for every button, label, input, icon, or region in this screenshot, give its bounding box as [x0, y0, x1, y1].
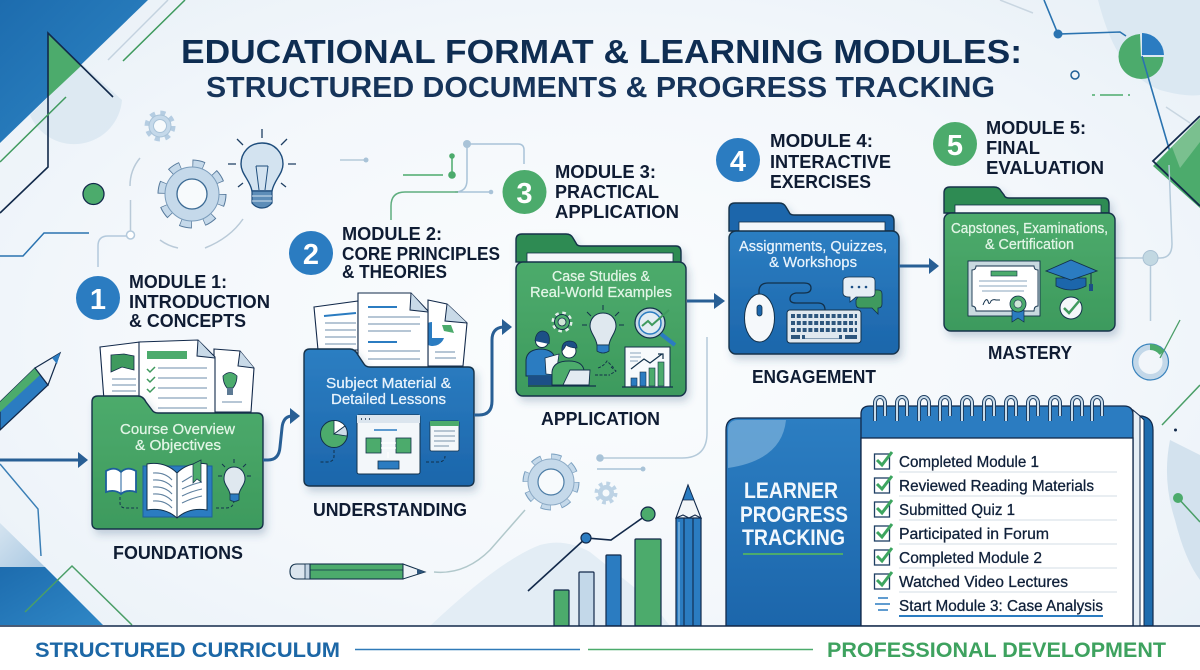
panel: module 4	[716, 131, 899, 387]
icon: chat bubbles	[843, 277, 882, 314]
folder text	[326, 375, 451, 408]
bar chart	[528, 507, 661, 626]
label: mastery: MASTERY	[988, 343, 1072, 363]
arrow: module 2 to 3	[474, 319, 512, 415]
heading module 5: EVALUATION	[986, 158, 1104, 178]
badge 5: 5	[947, 130, 963, 162]
footer right label: PROFESSIONAL DEVELOPMENT	[827, 639, 1166, 662]
folder text: Case Studies &	[552, 268, 650, 285]
heading module 2: & THEORIES	[342, 262, 447, 282]
icon: small gear	[147, 113, 173, 139]
checklist: Submitted Quiz 1	[899, 502, 1015, 519]
arrow: module 4 to 5	[899, 258, 939, 274]
folder text: Real-World Examples	[530, 284, 672, 301]
footer left label: STRUCTURED CURRICULUM	[35, 639, 340, 662]
heading module 3	[555, 162, 679, 222]
notebook back pages	[1133, 410, 1153, 626]
icon: bottom gear	[526, 457, 576, 507]
heading module 4: MODULE 4:	[770, 131, 873, 151]
badge 5	[933, 122, 977, 166]
label: engagement: ENGAGEMENT	[752, 367, 876, 387]
folder text	[739, 238, 887, 271]
title: STRUCTURED DOCUMENTS & PROGRESS TRACKING	[206, 72, 995, 104]
folder text: & Certification	[985, 236, 1074, 253]
heading module 2: MODULE 2:	[342, 224, 442, 244]
icon: large gear	[162, 164, 222, 224]
notebook page	[861, 406, 1133, 626]
icon: graduation cap	[1046, 260, 1097, 291]
folder text	[530, 268, 672, 301]
decorative corner: top right	[1000, 0, 1200, 208]
decorative corner: top left	[0, 0, 243, 267]
icon: small document	[430, 421, 459, 451]
decorative bottom right	[1162, 385, 1200, 580]
badge 3	[502, 170, 546, 214]
decorative corner: bottom left	[0, 464, 132, 625]
heading module 2	[342, 224, 500, 282]
badge 4: 4	[730, 146, 746, 178]
spiral rings	[875, 397, 1102, 421]
left cover: PROGRESS	[740, 502, 848, 527]
folder	[944, 187, 1115, 331]
arrow: module 1 to 2	[263, 408, 300, 460]
label: application: APPLICATION	[541, 409, 660, 429]
bottom connector lines	[434, 337, 707, 572]
icon: folder bulb	[218, 459, 251, 502]
checklist: Watched Video Lectures	[899, 574, 1068, 591]
arrow: module 3 to 4	[687, 293, 725, 309]
panel: module 5	[933, 118, 1115, 363]
checklist: Completed Module 1	[899, 454, 1039, 471]
icon: bulb	[582, 305, 624, 353]
checklist: Participated in Forum	[899, 526, 1049, 543]
title: EDUCATIONAL FORMAT & LEARNING MODULES:	[181, 33, 1022, 70]
icon: magnifier	[635, 308, 675, 345]
heading module 4: INTERACTIVE	[770, 152, 891, 172]
documents	[314, 293, 467, 367]
icon: certificate	[968, 261, 1040, 322]
folder text: Subject Material &	[326, 375, 451, 392]
folder text	[120, 421, 235, 454]
footer band	[0, 626, 1200, 670]
badge 4	[716, 138, 760, 182]
folder text: Course Overview	[120, 421, 235, 438]
icon: light bulb	[228, 129, 296, 208]
heading module 2: CORE PRINCIPLES	[342, 244, 500, 264]
heading module 5: FINAL	[986, 138, 1040, 158]
icon: mouse	[744, 283, 825, 342]
icon: window with diagram	[357, 415, 420, 474]
left cover: LEARNER	[744, 478, 838, 503]
left cover	[726, 418, 862, 626]
folder text: Detailed Lessons	[331, 391, 446, 408]
bottom chart decoration background	[430, 543, 670, 626]
right side connector and ring chart	[1115, 165, 1180, 380]
folder	[729, 203, 899, 354]
icon: small book	[106, 469, 234, 508]
heading module 5: MODULE 5:	[986, 118, 1086, 138]
icon: open book	[143, 460, 212, 518]
heading module 3: MODULE 3:	[555, 162, 656, 182]
panel: module 3	[502, 162, 686, 429]
icon: upright blue pencil	[676, 485, 701, 626]
label: foundations: FOUNDATIONS	[113, 543, 243, 563]
panel: module 2	[289, 224, 500, 520]
heading module 1: & CONCEPTS	[129, 311, 246, 331]
middle connector lines	[340, 140, 524, 220]
icon: gear	[553, 313, 571, 331]
badge 2	[289, 231, 333, 275]
heading module 5	[986, 118, 1104, 178]
heading module 1: MODULE 1:	[129, 272, 227, 292]
left cover: TRACKING	[742, 525, 845, 550]
folder text: Assignments, Quizzes,	[739, 238, 887, 255]
badge 2: 2	[303, 239, 319, 271]
badge 1: 1	[90, 284, 106, 316]
heading module 3: PRACTICAL	[555, 182, 659, 202]
icon: small bottom gear	[596, 484, 616, 502]
checklist: Completed Module 2	[899, 550, 1042, 567]
panel: learner progress tracking notebook	[726, 397, 1153, 626]
checklist: Reviewed Reading Materials	[899, 478, 1094, 495]
heading module 3: APPLICATION	[555, 202, 679, 222]
heading module 1	[129, 272, 270, 331]
badge 3: 3	[516, 178, 533, 210]
folder text: Capstones, Examinations,	[951, 220, 1108, 237]
title	[181, 33, 1022, 104]
icon: left pencil	[0, 353, 60, 430]
checklist	[874, 452, 1117, 616]
folder	[92, 396, 263, 529]
folder	[304, 349, 474, 486]
badge 1	[76, 276, 120, 320]
folder text: & Objectives	[135, 437, 221, 454]
folder text	[951, 220, 1108, 253]
icon: check circle	[1060, 297, 1082, 319]
icon: people at laptop	[526, 331, 616, 386]
panel: module 1	[76, 272, 270, 563]
folder	[516, 234, 686, 396]
heading module 1: INTRODUCTION	[129, 292, 270, 312]
documents	[100, 340, 254, 414]
icon: chart card	[622, 347, 673, 387]
checklist: Start Module 3: Case Analysis	[899, 598, 1103, 615]
icon: bottom green pencil	[290, 564, 425, 579]
icon: keyboard	[787, 310, 861, 343]
icon: pie chart	[320, 420, 445, 462]
arrow: intake to module 1	[0, 452, 88, 468]
heading module 4: EXERCISES	[770, 172, 871, 192]
label: understanding: UNDERSTANDING	[313, 500, 467, 520]
folder text: & Workshops	[769, 254, 857, 271]
heading module 4	[770, 131, 891, 192]
